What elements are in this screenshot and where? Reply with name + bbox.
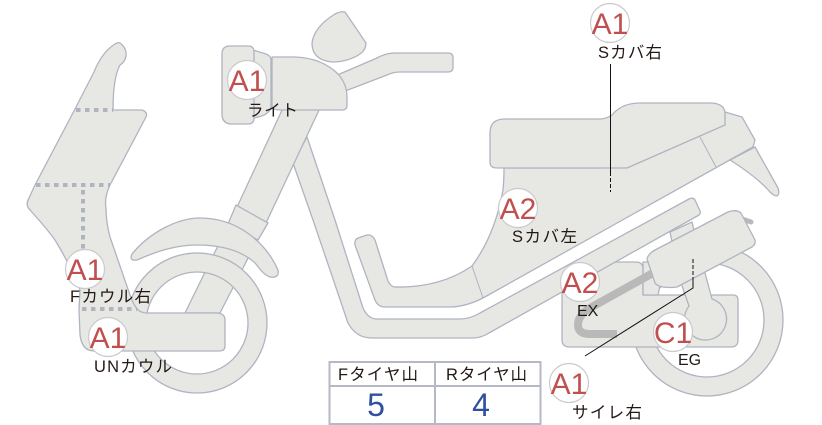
- tail fin: [730, 147, 779, 196]
- seat cover seam lines: [472, 137, 716, 298]
- front tire value: 5: [367, 387, 385, 423]
- damage marker: S cover left: A2: [500, 193, 536, 226]
- exhaust pipe: [578, 273, 653, 334]
- muffler: [647, 211, 755, 288]
- damage marker: S cover right: A1: [592, 8, 628, 41]
- damage marker: engine: [654, 312, 701, 369]
- front cowl: [27, 43, 225, 351]
- cowl dotted seams: [36, 110, 137, 309]
- front tire header: Fタイヤ山: [338, 365, 418, 384]
- damage marker: light: [228, 60, 298, 120]
- seat: [490, 103, 725, 168]
- damage marker: silencer right: [550, 364, 642, 422]
- damage marker: front cowl right: [66, 250, 151, 306]
- damage marker: S cover right: [590, 4, 662, 62]
- mirror: [312, 12, 366, 62]
- damage marker: light: ライト: [247, 102, 298, 120]
- damage marker: under cowl: [88, 318, 172, 376]
- main frame: [293, 137, 700, 338]
- tire tread table: [329, 362, 541, 424]
- damage marker: under cowl: A1: [90, 322, 126, 355]
- front wheel: [127, 253, 267, 393]
- engine box: [562, 262, 738, 347]
- damage marker: exhaust: EX: [577, 303, 599, 320]
- damage marker: under cowl: UNカウル: [94, 357, 172, 376]
- engine box upper tab: [643, 262, 665, 295]
- damage marker: light: A1: [229, 65, 265, 98]
- damage marker: exhaust: A2: [562, 267, 598, 300]
- front fork: [185, 108, 320, 313]
- damage marker: exhaust: [560, 262, 600, 320]
- damage marker: engine: EG: [678, 352, 701, 369]
- rear wheel: [631, 244, 783, 396]
- headlight: [222, 46, 271, 124]
- fork collar: [228, 205, 268, 240]
- damage marker: engine: C1: [654, 317, 692, 350]
- damage marker: S cover left: Sカバ左: [512, 227, 577, 246]
- seat cover: [355, 112, 779, 307]
- handlebar head: [272, 57, 347, 110]
- rear tire header: Rタイヤ山: [446, 365, 527, 384]
- leader line: silencer right: [585, 259, 693, 356]
- front fender: [131, 218, 278, 277]
- rear tire value: 4: [472, 387, 490, 423]
- leader line: S cover right: [610, 64, 612, 192]
- rear suspension: [670, 222, 727, 340]
- damage marker: silencer right: サイレ右: [572, 403, 642, 422]
- damage marker: silencer right: A1: [551, 368, 587, 401]
- damage marker: front cowl right: A1: [67, 254, 103, 287]
- damage marker: S cover left: [498, 188, 577, 246]
- handlebar grip: [335, 53, 453, 93]
- damage marker: S cover right: Sカバ右: [598, 43, 662, 62]
- damage marker: front cowl right: Fカウル右: [70, 287, 151, 306]
